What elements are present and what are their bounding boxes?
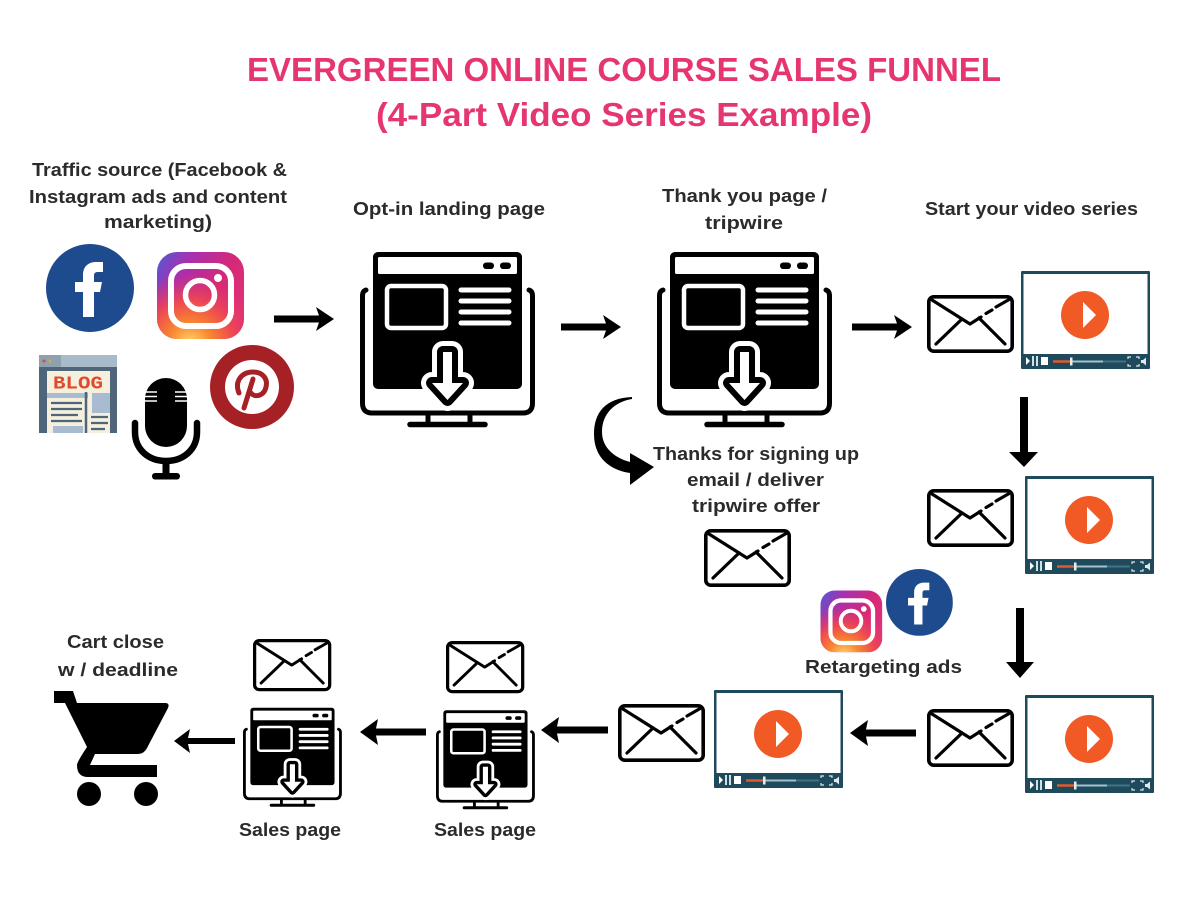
icon: retargeting instagram — [820, 590, 882, 652]
icon: thank you page monitor — [660, 252, 830, 424]
text: cart close: Cart close — [67, 632, 164, 652]
icon: sales page monitor 2 — [437, 710, 533, 808]
title: EVERGREEN ONLINE COURSE SALES FUNNEL — [247, 51, 1001, 88]
icon: sales page email 1 — [255, 641, 330, 690]
email and video 3 — [929, 695, 1154, 793]
step heading: traffic source: marketing) — [104, 212, 212, 232]
title: (4-Part Video Series Example) — [376, 96, 872, 133]
email and video 2 — [929, 476, 1154, 574]
step heading: start video series: Start your video series — [925, 199, 1138, 219]
arrow: down to video 3 — [1006, 608, 1034, 678]
icon: shopping cart — [54, 691, 169, 806]
step heading: opt-in landing page: Opt-in landing page — [353, 199, 545, 219]
arrow: email to sales page 2 — [541, 717, 608, 743]
icon: sales page email 2 — [448, 643, 523, 692]
title — [247, 51, 1001, 133]
video 4 and email — [620, 690, 843, 788]
text: cart close — [57, 632, 178, 680]
text: cart close: w / deadline — [57, 660, 178, 680]
arrow: opt-in to thank you — [561, 315, 621, 339]
step heading: thank you page: Thank you page / — [662, 186, 827, 206]
icon: blog — [39, 355, 117, 433]
text: retargeting ads: Retargeting ads — [805, 657, 962, 677]
step heading: traffic source: Traffic source (Facebook & — [32, 160, 287, 180]
arrow: thank you to video series — [852, 315, 912, 339]
arrow: down to video 2 — [1009, 397, 1038, 467]
arrow: traffic to opt-in — [274, 307, 334, 331]
step heading: thank you page: tripwire — [705, 213, 783, 233]
text: thanks for signing up email: email / deliver — [687, 470, 824, 490]
step heading: traffic source: Instagram ads and content — [29, 187, 287, 207]
text: sales page 2: Sales page — [434, 820, 536, 840]
icon: instagram — [157, 252, 244, 339]
text: thanks for signing up email: Thanks for signing up — [653, 444, 859, 464]
arrow: video 3 to video 4 — [850, 720, 916, 746]
step heading: thank you page — [662, 186, 827, 233]
icon: blog: BLOG — [53, 374, 103, 394]
icon: facebook — [46, 244, 134, 332]
arrow: sales page 1 to cart — [174, 729, 235, 753]
icon: opt-in landing page monitor — [362, 252, 532, 424]
arrow: sales page 2 to sales page 1 — [360, 719, 426, 745]
step heading: traffic source — [29, 160, 287, 232]
icon: retargeting facebook — [886, 569, 953, 636]
icon: microphone — [135, 378, 197, 480]
curved arrow to thank-you email — [594, 397, 654, 485]
text: thanks for signing up email: tripwire offer — [692, 496, 820, 516]
icon: pinterest — [210, 345, 294, 429]
text: sales page 1: Sales page — [239, 820, 341, 840]
icon: tripwire email — [706, 531, 789, 585]
icon: sales page monitor 1 — [244, 708, 340, 805]
text: thanks for signing up email — [653, 444, 859, 516]
email and video 1 — [929, 271, 1150, 369]
